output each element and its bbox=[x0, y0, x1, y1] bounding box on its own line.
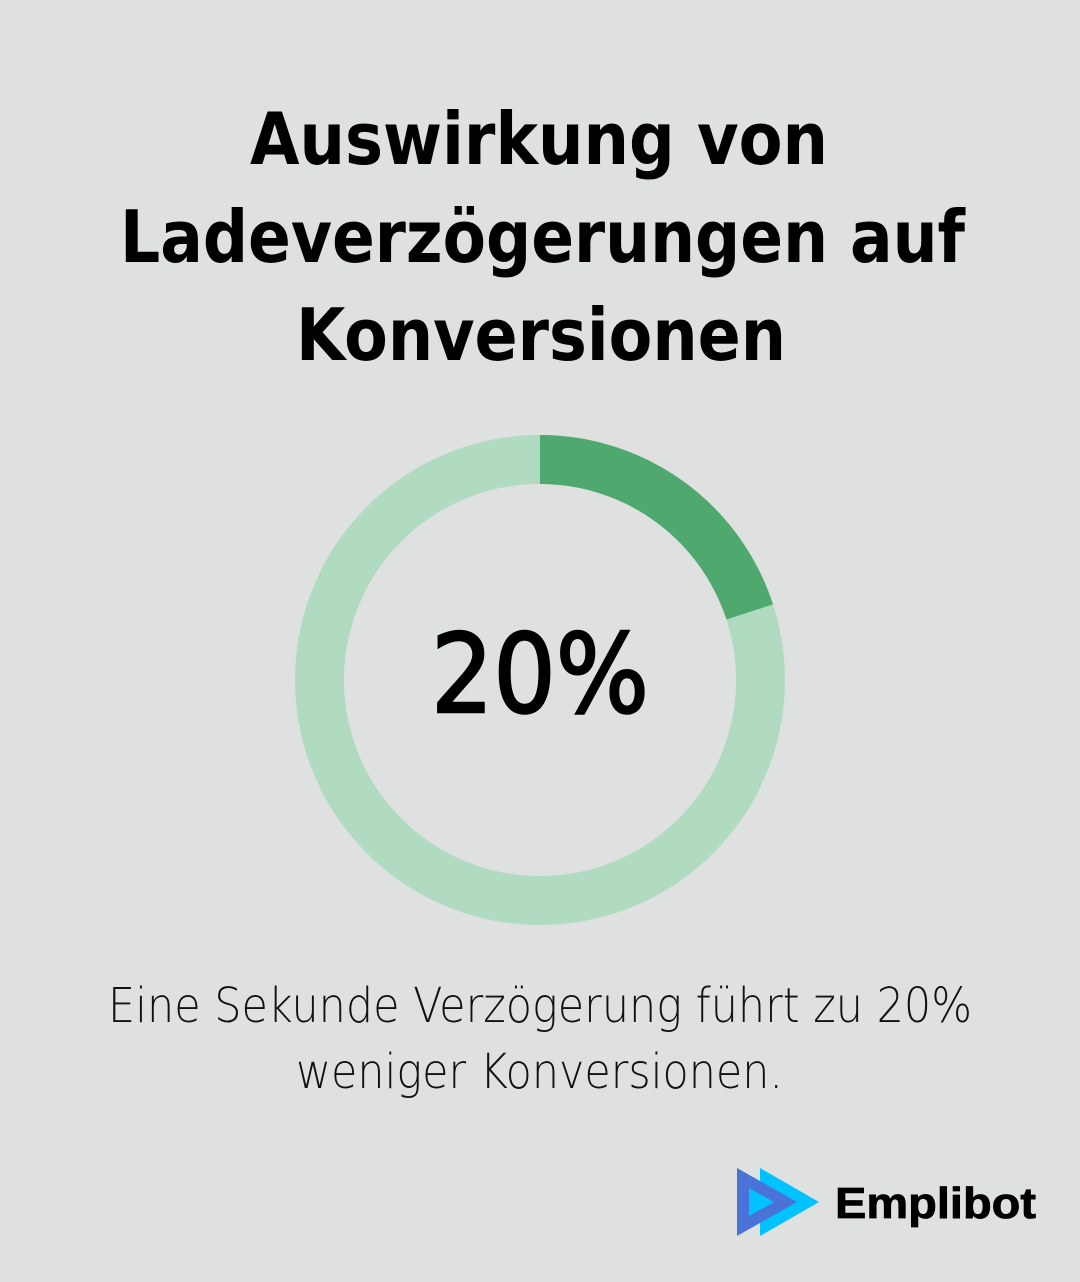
donut chart: 20 percent bbox=[320, 460, 760, 900]
caption: weniger Konversionen. bbox=[296, 1044, 783, 1100]
caption: Eine Sekunde Verzögerung führt zu 20% bbox=[108, 978, 972, 1034]
title: Auswirkung von bbox=[250, 97, 828, 181]
logo: Emplibot bbox=[737, 1168, 1036, 1236]
title: Konversionen bbox=[296, 293, 786, 377]
title bbox=[120, 97, 966, 377]
icon: play triangles bbox=[737, 1168, 819, 1236]
title: Ladeverzögerungen auf bbox=[120, 195, 966, 279]
donut value: 20% bbox=[431, 611, 649, 738]
logo wordmark: Emplibot bbox=[835, 1179, 1036, 1228]
caption bbox=[108, 978, 972, 1100]
